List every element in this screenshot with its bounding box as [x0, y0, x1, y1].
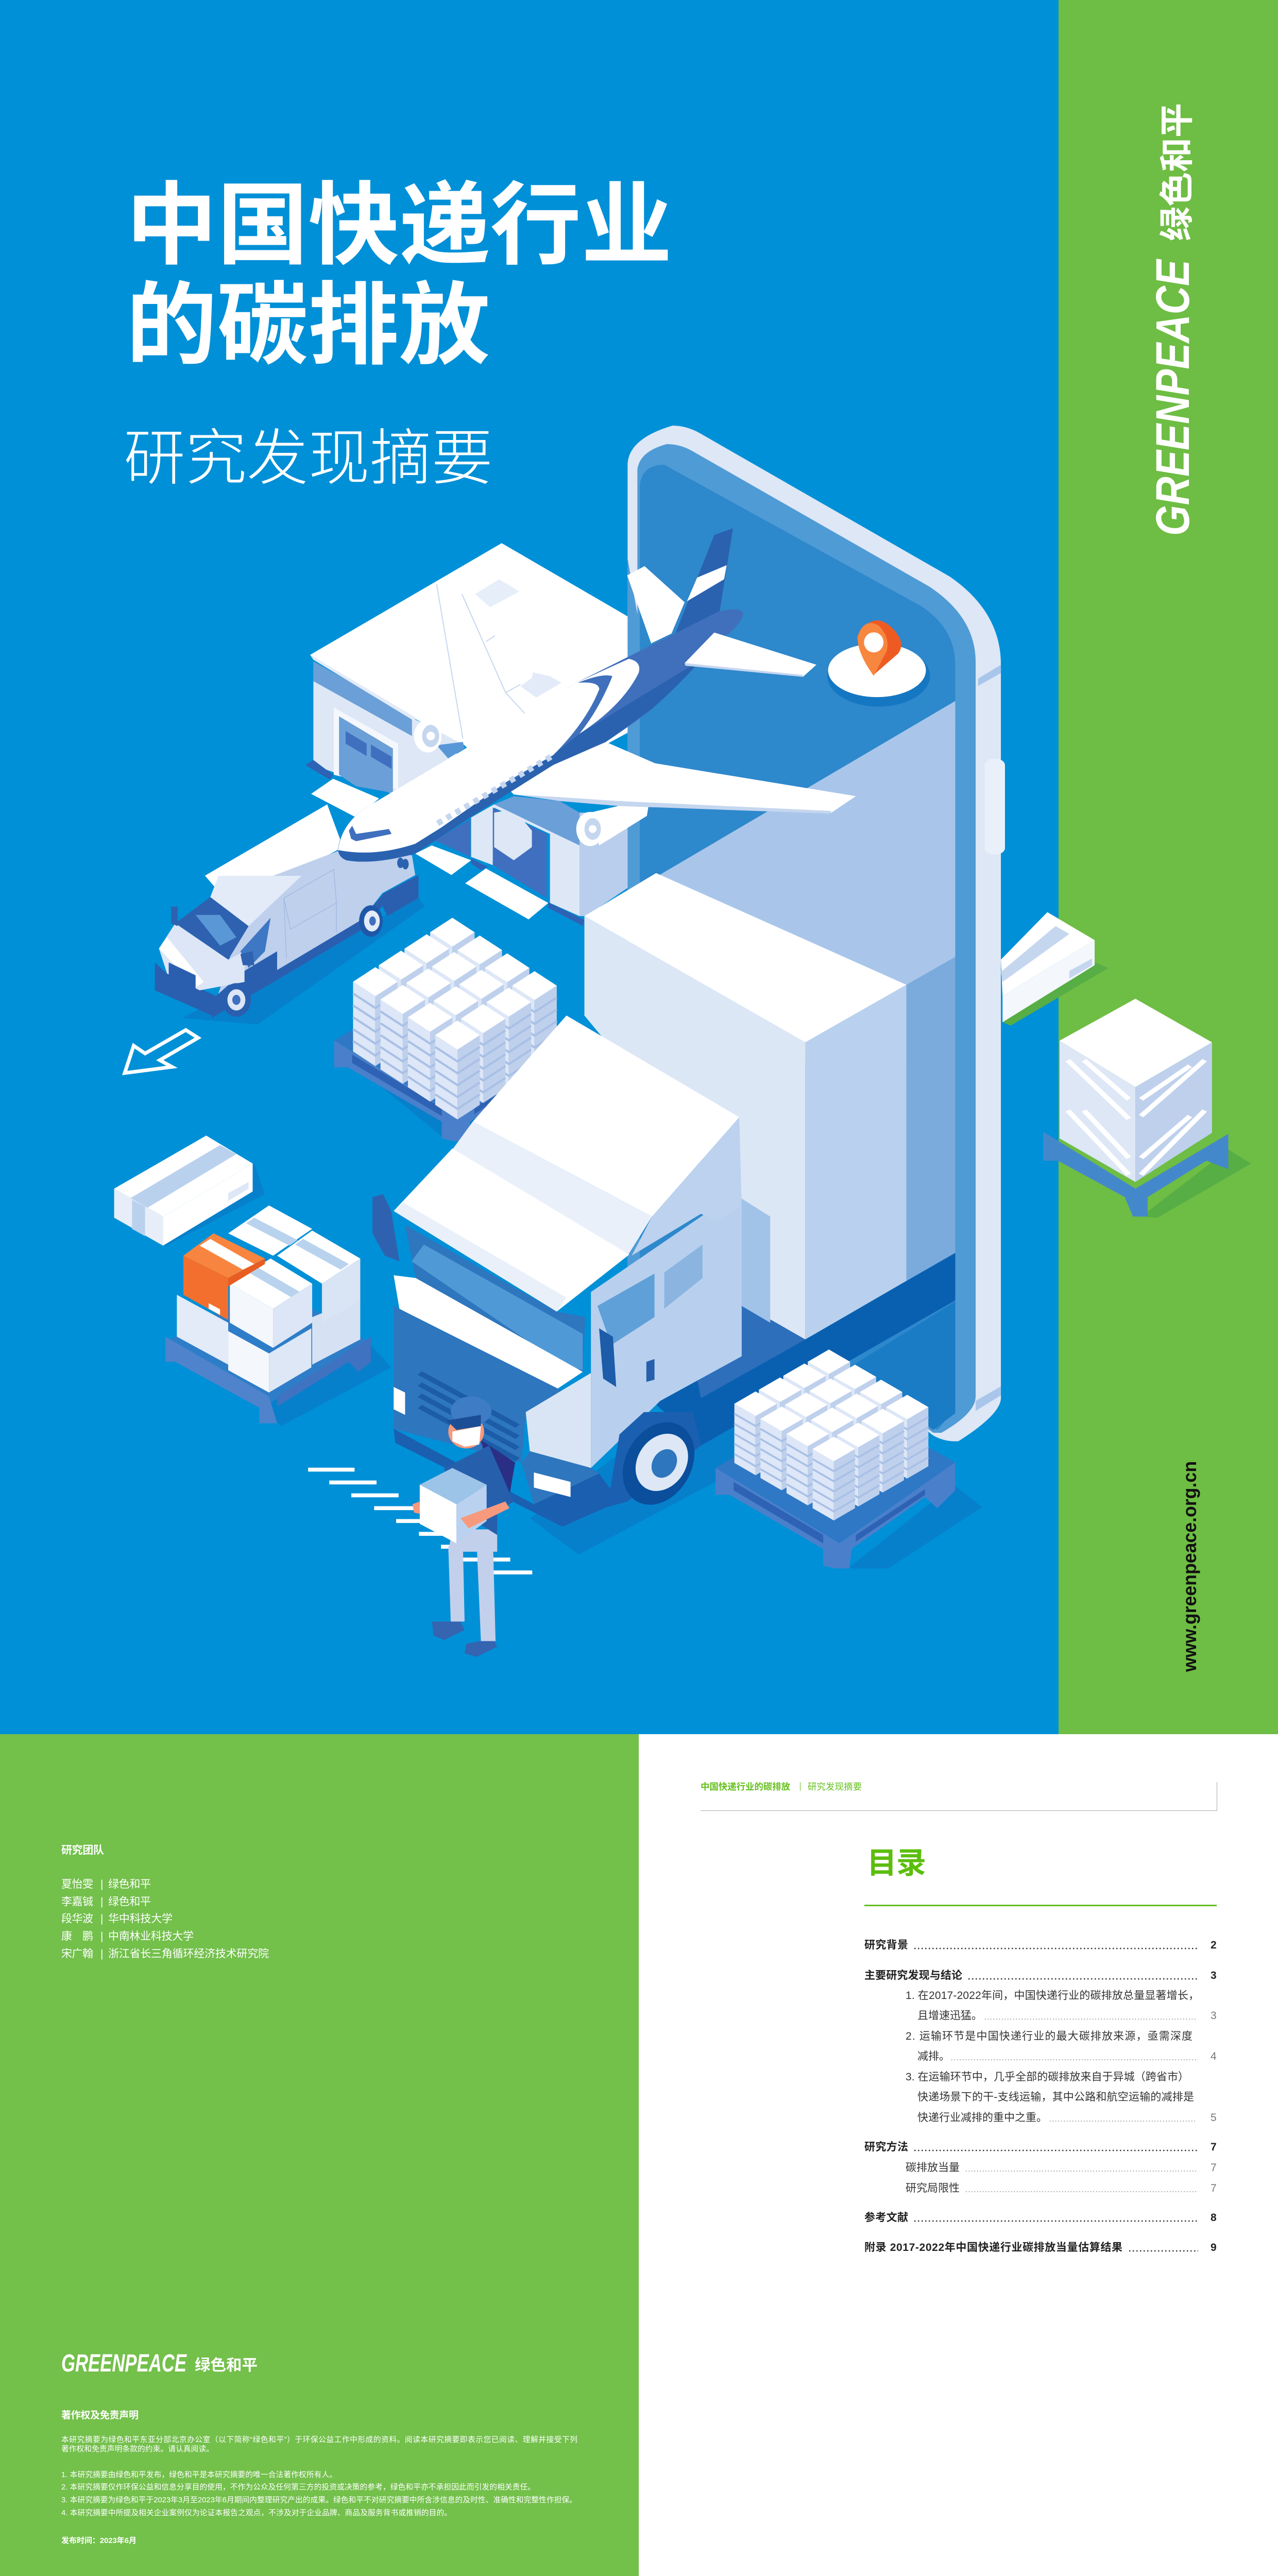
contents list: 2. 运输环节是中国快递行业的最大碳排放来源，亟需深度: [906, 2030, 1192, 2042]
cover title: 的碳排放: [126, 276, 490, 376]
contents list: 附录 2017-2022年中国快递行业碳排放当量估算结果: [864, 2242, 1122, 2253]
research team list: 浙江省长三角循环经济技术研究院: [108, 1948, 269, 1960]
research team list: 李嘉铖: [61, 1896, 93, 1908]
contents list: 3: [1211, 1970, 1217, 1981]
illustration: large truck: [372, 873, 955, 1554]
copyright text block: 2. 本研究摘要仅作环保公益和信息分享目的使用，不作为公众及任何第三方的投资或决策的参考，绿色和平亦不承担因此而引发的相关责任。: [61, 2482, 535, 2492]
page header: 中国快递行业的碳排放: [701, 1782, 791, 1792]
contents list: 8: [1211, 2212, 1217, 2224]
heading: contents: 目录: [867, 1846, 926, 1880]
research team list: 段华波: [61, 1913, 93, 1925]
contents list: 2: [1211, 1939, 1217, 1951]
page header: 研究发现摘要: [808, 1782, 862, 1792]
panel: cover page: [0, 0, 1278, 1734]
heading: copyright and disclaimer: 著作权及免责声明: [61, 2409, 139, 2421]
logo: vertical Greenpeace: GREENPEACE: [1147, 259, 1199, 536]
contents list: 减排。: [917, 2050, 950, 2062]
green background: [0, 1734, 639, 2576]
research team list: |: [100, 1930, 103, 1942]
research team list: |: [100, 1913, 103, 1925]
contents list: 快递场景下的干-支线运输，其中公路和航空运输的减排是: [917, 2091, 1194, 2103]
contents list: 且增速迅猛。: [917, 2010, 982, 2022]
copyright text block: [61, 2435, 577, 2517]
contents list: 7: [1211, 2162, 1217, 2174]
panel: research team and copyright page: [0, 1734, 639, 2576]
contents list: 9: [1211, 2242, 1217, 2253]
illustration: pallet with stacked parcels, upper: [334, 918, 574, 1141]
contents list: 快递行业减排的重中之重。: [917, 2112, 1047, 2124]
cover green side band: [1059, 0, 1278, 1734]
contents list: 1. 在2017-2022年间，中国快递行业的碳排放总量显著增长，: [906, 1990, 1199, 2002]
contents list: 碳排放当量: [906, 2162, 960, 2174]
research team list: 华中科技大学: [108, 1913, 173, 1925]
website url: www.greenpeace.org.cn: [1179, 1461, 1200, 1672]
illustration: parcel from phone on green band: [1001, 912, 1109, 1026]
research team list: 宋广翰: [61, 1948, 93, 1960]
contents list: 研究方法: [864, 2141, 908, 2153]
logo: Greenpeace: GREENPEACE: [61, 2350, 187, 2377]
contents list: 主要研究发现与结论: [864, 1969, 962, 1981]
icon: orange location pin: [858, 620, 901, 676]
page header: [701, 1782, 1217, 1811]
illustration: airplane: [338, 529, 856, 870]
contents list: 4: [1211, 2050, 1217, 2062]
cover title: 中国快递行业: [126, 176, 672, 276]
illustration: pallet with parcels, lower right: [715, 1349, 982, 1568]
logo: vertical Greenpeace: 绿色和平: [1158, 103, 1197, 241]
research team list: 中南林业科技大学: [108, 1930, 194, 1942]
publication date: 发布时间：2023年6月: [61, 2536, 137, 2545]
illustration: pallet with parcels and orange box: [165, 1206, 391, 1426]
research team list: 绿色和平: [108, 1878, 151, 1890]
research team list: |: [100, 1878, 103, 1890]
heading: research team: 研究团队: [61, 1844, 104, 1856]
cover title: [126, 176, 672, 376]
copyright text block: 著作权和免责声明条款的约束。请认真阅读。: [61, 2444, 214, 2453]
contents list: 3: [1211, 2010, 1217, 2022]
copyright text block: 3. 本研究摘要为绿色和平于2023年3月至2023年6月期间内整理研究产出的成果。绿色和平不对研究摘要中所含涉信息的及时性、准确性和完整性作担保。: [61, 2495, 577, 2504]
illustration: wrapped pallet on green band: [1043, 999, 1251, 1218]
research team list: [61, 1878, 269, 1960]
illustration: smartphone: [627, 426, 1005, 1442]
contents list: 3. 在运输环节中，几乎全部的碳排放来自于异城（跨省市）: [906, 2071, 1189, 2083]
contents list: 研究背景: [864, 1939, 908, 1951]
research team list: |: [100, 1896, 103, 1908]
copyright text block: 本研究摘要为绿色和平东亚分部北京办公室（以下简称“绿色和平”）于环保公益工作中形成的资料。阅读本研究摘要即表示您已阅读、理解并接受下列: [61, 2435, 577, 2444]
contents list: 研究局限性: [906, 2182, 960, 2194]
contents list: 7: [1211, 2141, 1217, 2153]
logo: Greenpeace: 绿色和平: [195, 2357, 258, 2374]
cover blue background: [0, 0, 1059, 1734]
contents list: [864, 1939, 1217, 2253]
research team list: 康 鹏: [61, 1930, 93, 1942]
research team list: |: [100, 1948, 103, 1960]
illustration: warehouse building: [305, 543, 632, 926]
icon: left-pointing arrow outline: [125, 1030, 198, 1073]
research team list: 夏怡雯: [61, 1878, 93, 1890]
research team list: 绿色和平: [108, 1896, 151, 1908]
contents list: 5: [1211, 2112, 1217, 2124]
contents list: 7: [1211, 2182, 1217, 2194]
illustration: courier holding parcel: [308, 1396, 532, 1657]
copyright text block: 1. 本研究摘要由绿色和平发布，绿色和平是本研究摘要的唯一合法著作权所有人。: [61, 2470, 337, 2479]
cover subtitle: 研究发现摘要: [124, 425, 493, 493]
contents list: 参考文献: [864, 2211, 908, 2224]
illustration: delivery van on cover: [155, 515, 515, 1025]
panel: table of contents page: [701, 1782, 1217, 2253]
illustration: long box: [114, 1136, 265, 1247]
copyright text block: 4. 本研究摘要中所提及相关企业案例仅为论证本报告之观点，不涉及对于企业品牌、商品及服务背书或推销的目的。: [61, 2508, 452, 2517]
